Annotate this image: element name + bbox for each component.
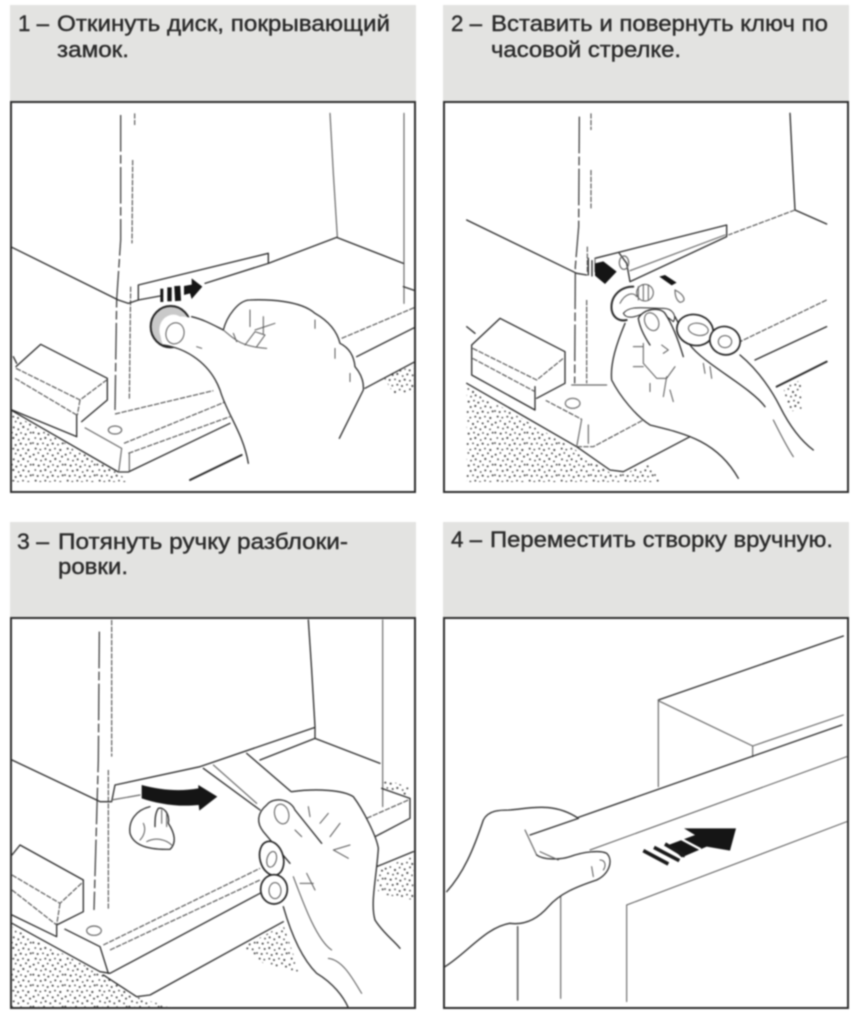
heading: step 3 text: Потянуть ручку разблоки-: [58, 529, 348, 554]
heading: step 2 text: [451, 11, 828, 62]
header: step 1 background: [10, 5, 416, 101]
icon: hand holding key: [611, 305, 813, 478]
illustration frame: step 1: [11, 102, 415, 492]
panel: step 3: [10, 522, 416, 1008]
heading: step 2 text: Вставить и повернуть ключ по: [491, 11, 828, 36]
gate leaf lines: [518, 725, 847, 1002]
gate post and wall lines: [12, 620, 383, 910]
illustration frame: step 4: [444, 618, 848, 1008]
heading: step 3 text: 3 –: [17, 529, 50, 554]
stippled ground: [12, 365, 415, 482]
illustration: move gate leaf by hand: [445, 636, 847, 1002]
icon: key in lock: [611, 284, 653, 320]
heading: step 2 text: 2 –: [451, 11, 483, 36]
heading: step 1 text: замок.: [57, 37, 129, 62]
gate post and wall lines: [11, 113, 415, 410]
header: step 3 background: [10, 522, 416, 618]
arrow: turn key clockwise: [659, 275, 684, 302]
illustration frame: step 2: [444, 102, 848, 492]
heading: step 4 text: 4 –: [451, 527, 483, 552]
heading: step 3 text: ровки.: [58, 554, 128, 579]
release handle strap: [203, 753, 295, 810]
icon: hand on gate leaf: [445, 807, 610, 967]
arrow: pull direction: [142, 785, 217, 811]
illustration: insert and turn key: [467, 113, 827, 482]
base plate and rail: [12, 788, 413, 997]
gear motor cover box: [12, 344, 107, 437]
header: step 4 background: [443, 522, 849, 618]
panel: step 4: [443, 522, 849, 1008]
panel: step 1: [10, 5, 416, 492]
icon: key left in lock: [130, 807, 174, 849]
base plate and rail: [467, 300, 827, 472]
heading: step 1 text: [18, 11, 390, 62]
arrow: slide disc to the right: [160, 278, 202, 302]
heading: step 3 text: [17, 529, 348, 579]
disc covering the lock: [151, 306, 191, 347]
gear motor cover box: [12, 845, 83, 937]
header: step 2 background: [443, 5, 849, 101]
stippled ground: [467, 380, 802, 482]
gate post and wall lines: [467, 113, 827, 383]
panel: step 2: [443, 5, 849, 492]
open flap: [595, 225, 727, 282]
base plate and rail: [12, 307, 415, 480]
stippled ground: [12, 778, 413, 1008]
illustration: pull release handle: [12, 620, 413, 1008]
heading: step 2 text: часовой стрелке.: [491, 37, 681, 62]
gate motor housing lines: [658, 636, 843, 787]
illustration frame: step 3: [11, 618, 415, 1008]
arrow: slide direction: [643, 828, 736, 864]
heading: step 1 text: Откинуть диск, покрывающий: [57, 11, 390, 36]
illustration: press disc with finger: [11, 113, 415, 482]
heading: step 1 text: 1 –: [18, 11, 50, 36]
arrow: slide disc: [588, 258, 617, 284]
gear motor cover box: [467, 318, 565, 410]
icon: hand pressing disc: [161, 300, 363, 463]
heading: step 4 text: Переместить створку вручную.: [490, 527, 833, 552]
icon: hand pulling handle: [256, 790, 400, 1008]
